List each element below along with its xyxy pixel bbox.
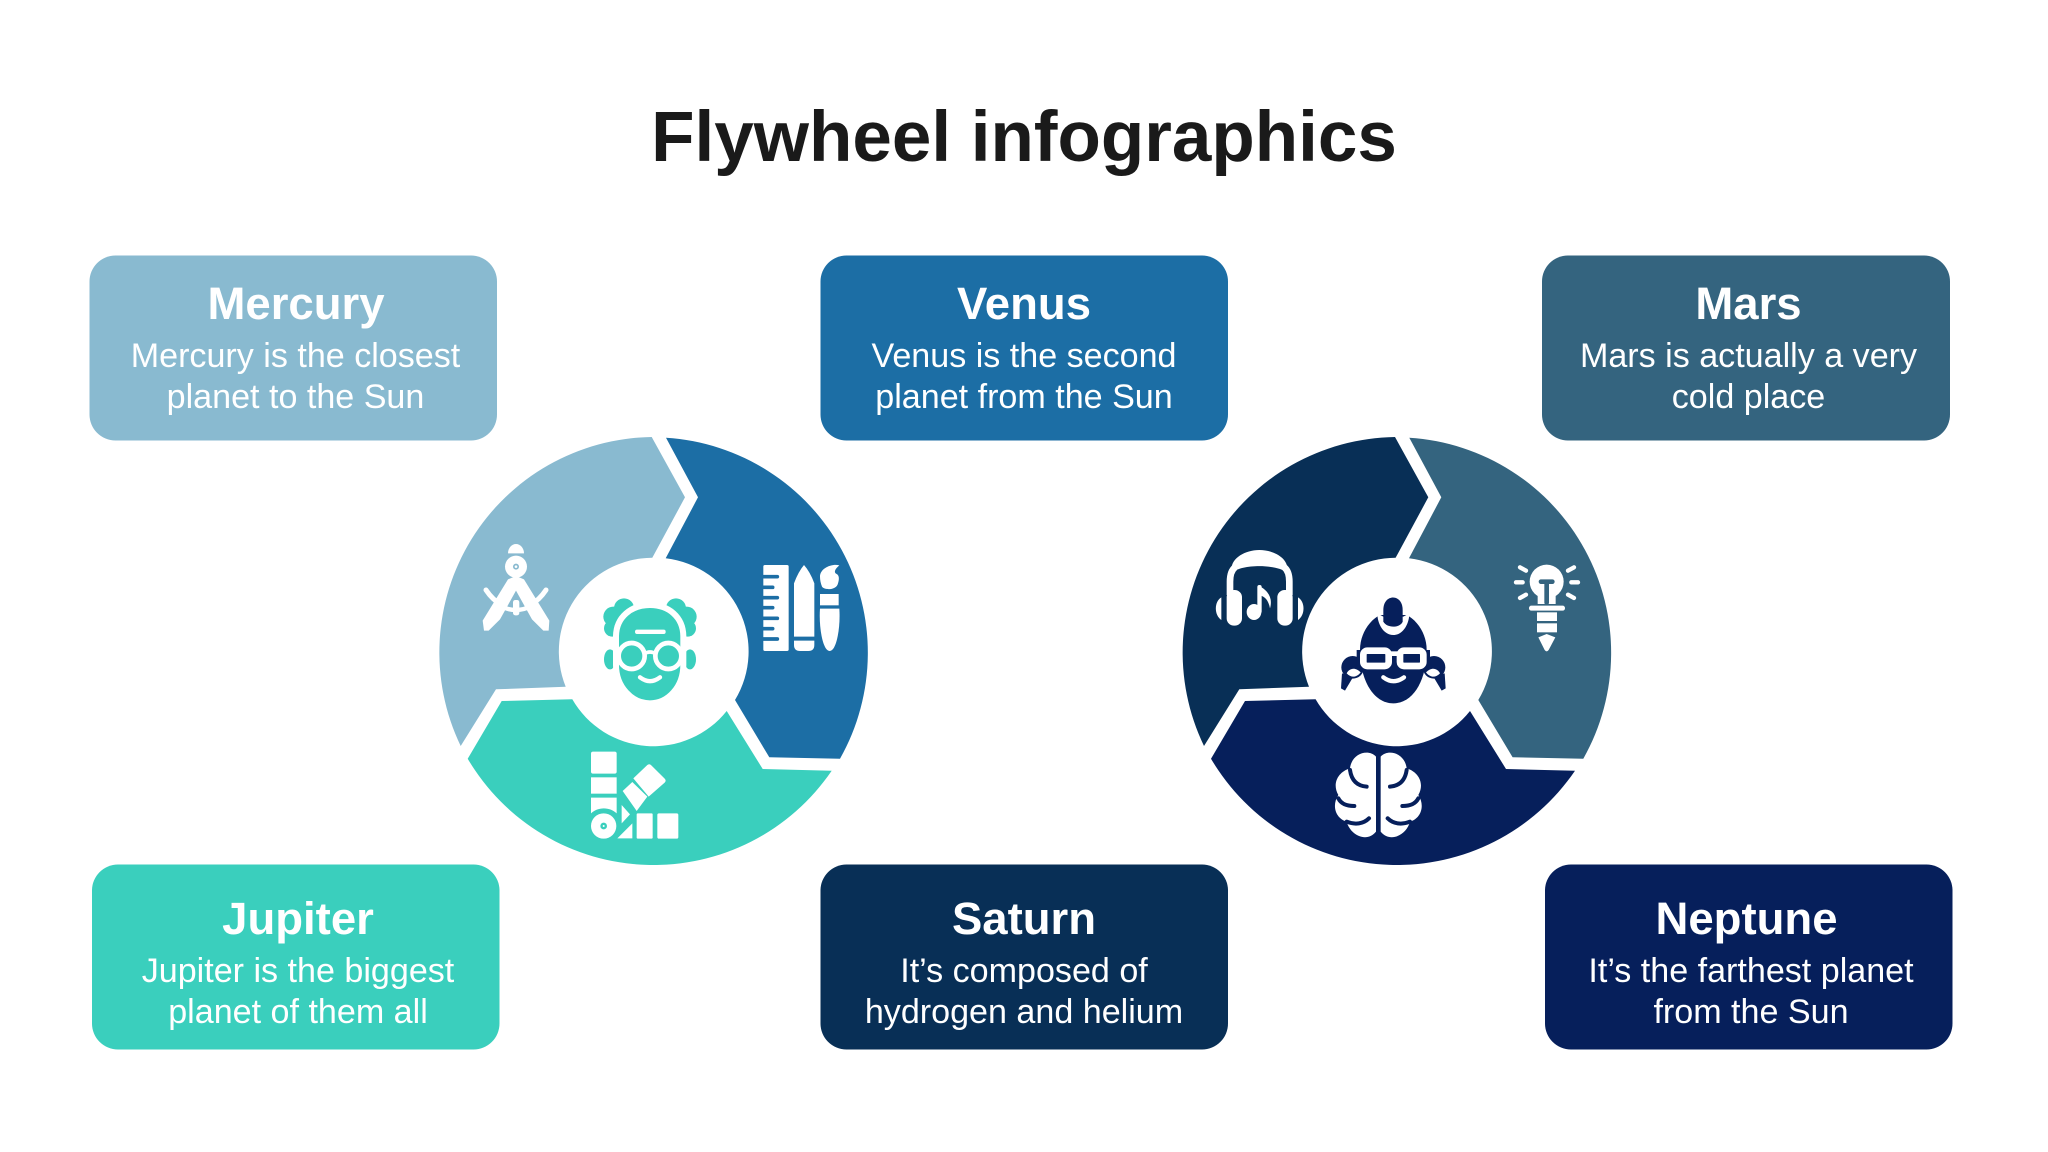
segment: Mercury: [439, 437, 685, 746]
segment: Mars: [1409, 438, 1611, 759]
panel: Mercury: planet to the Sun: [167, 378, 424, 416]
segment: Neptune: [1211, 699, 1575, 865]
panel: Mars: Mars: [1695, 278, 1802, 329]
panel: Venus: Venus is the second: [871, 337, 1177, 375]
segment: Saturn: [1183, 437, 1428, 746]
panel: Neptune: Neptune: [1656, 893, 1838, 944]
panel: Jupiter: Jupiter: [222, 893, 374, 944]
panel: Saturn: It’s composed of: [900, 952, 1148, 990]
icon: punk person: [1341, 597, 1446, 703]
panel: Neptune: It’s the farthest planet: [1588, 952, 1914, 990]
panel: Saturn: hydrogen and helium: [865, 993, 1183, 1031]
left flywheel: [439, 437, 868, 865]
title: Flywheel infographics: [651, 98, 1397, 177]
panel: Mars: Mars is actually a very: [1580, 337, 1917, 375]
panel: Mercury: Mercury: [207, 278, 385, 329]
panel: Saturn: [820, 864, 1228, 1050]
icon: professor: [603, 598, 697, 703]
icon: art tools: [761, 565, 840, 651]
icon: brain: [1335, 753, 1422, 837]
panel: Mars: cold place: [1672, 378, 1825, 416]
panel: Mercury: [90, 256, 497, 440]
panel: Jupiter: planet of them all: [168, 993, 428, 1031]
icon: headphones: [1216, 550, 1303, 626]
panel: Saturn: Saturn: [952, 893, 1096, 944]
panel: Jupiter: [92, 864, 500, 1050]
panel: Venus: planet from the Sun: [875, 378, 1173, 416]
segment: Venus: [666, 438, 868, 759]
panel: Neptune: [1545, 864, 1952, 1050]
panel: Venus: [820, 256, 1228, 440]
panel: Mercury: Mercury is the closest: [131, 337, 461, 375]
icon: light bulb pen: [1516, 565, 1578, 651]
icon: swatches: [591, 752, 678, 839]
panel: Jupiter: Jupiter is the biggest: [142, 952, 455, 990]
segment: Jupiter: [468, 699, 832, 865]
right flywheel: [1183, 437, 1611, 865]
panel: Mars: [1542, 256, 1950, 440]
panel: Venus: Venus: [957, 278, 1091, 329]
panel: Neptune: from the Sun: [1653, 993, 1849, 1031]
icon: compass: [483, 544, 549, 631]
